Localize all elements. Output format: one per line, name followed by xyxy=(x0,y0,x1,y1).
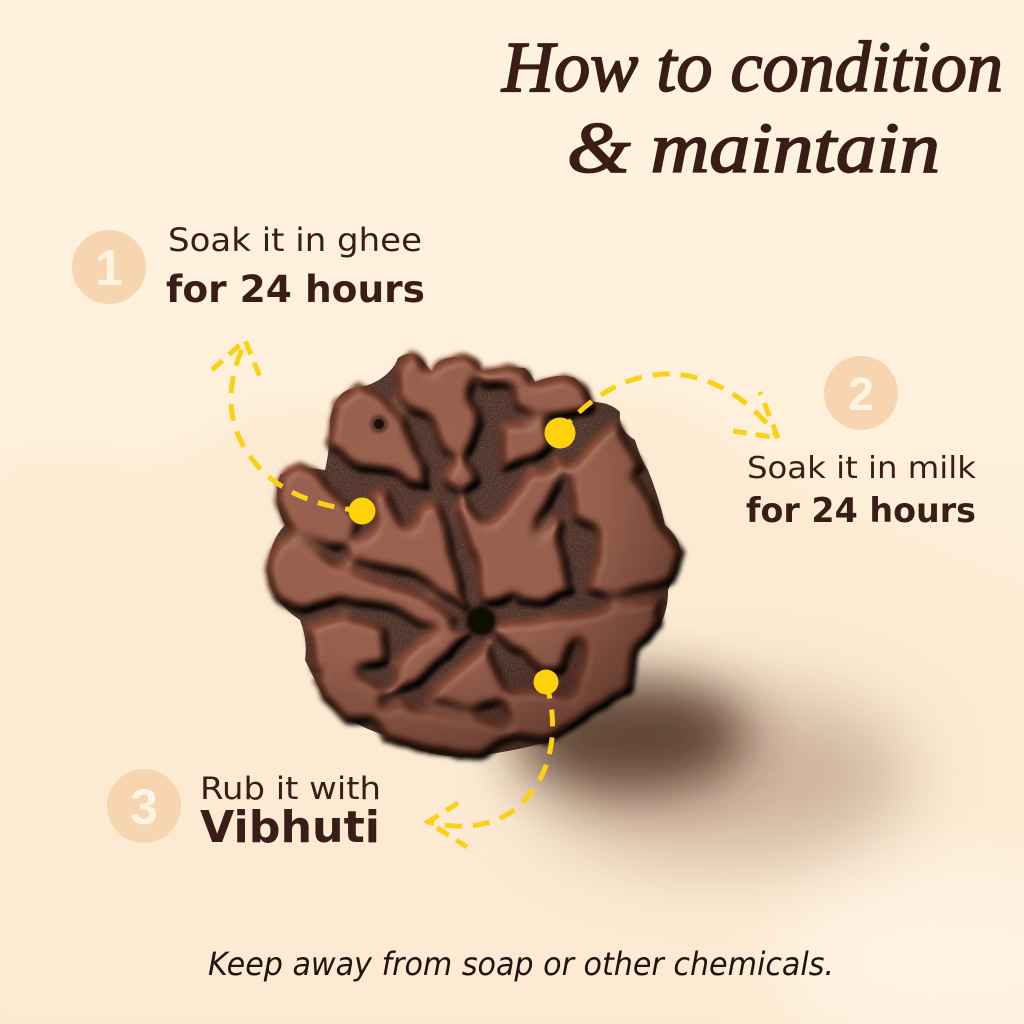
step 1 text: for 24 hours xyxy=(166,268,425,311)
badge 1 xyxy=(72,230,146,304)
arrow 3 xyxy=(428,670,558,847)
bead holes xyxy=(370,415,499,639)
title: & maintain xyxy=(567,108,940,188)
badge 2 xyxy=(824,356,898,430)
step 2 xyxy=(746,356,977,531)
step 3 text: Vibhuti xyxy=(200,802,380,853)
bead side shading xyxy=(267,354,680,757)
step 1 xyxy=(72,221,425,311)
arrow 1 xyxy=(212,340,376,524)
title: How to condition xyxy=(501,27,1003,107)
bead ridges xyxy=(268,353,680,755)
title xyxy=(501,27,1003,188)
step 1 text: Soak it in ghee xyxy=(168,221,422,259)
bead body xyxy=(267,354,680,757)
badge 3 xyxy=(107,769,181,843)
badge 1: 1 xyxy=(95,240,123,296)
rudraksha bead xyxy=(267,353,680,757)
badge 3: 3 xyxy=(130,779,158,835)
bead shadow xyxy=(512,679,910,860)
step 3 text: Rub it with xyxy=(200,771,381,807)
badge 2: 2 xyxy=(848,368,874,420)
footer note: Keep away from soap or other chemicals. xyxy=(208,945,834,983)
arrow 2 xyxy=(544,374,778,448)
step 2 text: Soak it in milk xyxy=(747,451,977,486)
step 2 text xyxy=(746,451,977,531)
step 1 text xyxy=(166,221,425,311)
step 2 text: for 24 hours xyxy=(746,491,976,531)
step 3 text xyxy=(200,771,381,853)
step 3 xyxy=(107,769,381,853)
